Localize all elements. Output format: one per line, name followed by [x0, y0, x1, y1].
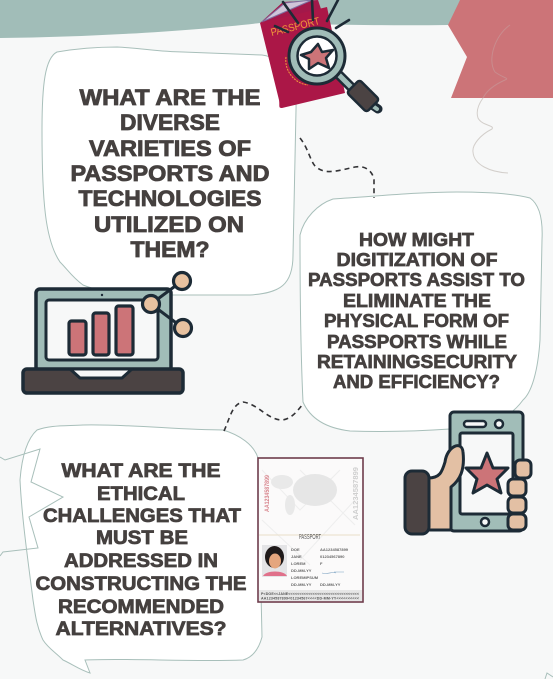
bar chart [69, 306, 133, 355]
icon: laptop with bar chart [23, 272, 192, 393]
left torn outline [0, 449, 63, 556]
passport page title: PASSPORT [299, 532, 321, 541]
decorative squiggle [473, 25, 510, 173]
heading: question 3: ETHICAL [97, 483, 185, 505]
arrow: dashed connector 2 to 3 [224, 402, 303, 431]
heading: question 2: PASSPORTS WHILE [327, 331, 507, 352]
passport data fields: DD-MM-YY [320, 582, 341, 587]
vertical grey number: AA1234587899 [353, 467, 360, 520]
panel: question 2 bubble [300, 192, 542, 431]
heading: question 1: DIVERSE [120, 110, 220, 135]
heading: question 2: RETAININGSECURITY [317, 351, 518, 372]
passport data fields: JANE [291, 554, 302, 559]
icon: hand holding phone with star [405, 412, 531, 534]
heading: question 3: RECOMMENDED [58, 596, 224, 618]
heading: question 2: DIGITIZATION OF [336, 249, 498, 270]
heading: question 3 [36, 460, 246, 640]
heading: question 3: ALTERNATIVES? [56, 618, 226, 640]
passport data fields: DD-MM-YY [291, 582, 312, 587]
passport cover label: PASSPORT [270, 15, 321, 39]
panel: question 1 bubble [42, 47, 296, 295]
heading: question 2: ELIMINATE THE [343, 290, 491, 311]
passport data fields: 01234567890 [320, 554, 345, 559]
heading: question 2: PHYSICAL FORM OF [324, 310, 509, 331]
heading: question 3: ADDRESSED IN [64, 550, 218, 572]
heading: question 3: MUST BE [96, 527, 188, 549]
portrait [262, 545, 287, 577]
heading: question 3: CONSTRUCTING THE [36, 573, 246, 595]
icon: passport with magnifier [260, 0, 379, 112]
heading: question 1: TECHNOLOGIES [78, 186, 262, 211]
passport data fields: DOE [291, 547, 300, 552]
panel: question 3 bubble [20, 425, 262, 673]
passport data fields [291, 547, 349, 587]
passport data fields: DD-MM-YY [291, 568, 312, 573]
icon: passport data page [258, 458, 363, 602]
share nodes [142, 272, 192, 336]
heading: question 2 [308, 229, 525, 392]
heading: question 1: VARIETIES OF [89, 136, 251, 161]
heading: question 2: AND EFFICIENCY? [333, 371, 500, 392]
heading: question 2: HOW MIGHT [359, 229, 475, 250]
heading: question 2: PASSPORTS ASSIST TO [308, 269, 525, 290]
passport data fields: LOREMIPSUM [291, 575, 319, 580]
heading: question 1: UTILIZED ON [94, 212, 244, 237]
decorative corner mark [545, 673, 553, 679]
heading: question 1 [70, 85, 270, 262]
passport data fields: F [320, 561, 323, 566]
heading: question 1: THEM? [130, 237, 210, 262]
vertical red number: AA1234587899 [265, 474, 271, 512]
passport data fields: LOREM [291, 561, 306, 566]
heading: question 1: WHAT ARE THE [80, 85, 260, 110]
top teal band [0, 0, 466, 38]
heading: question 3: CHALLENGES THAT [43, 505, 241, 527]
heading: question 1: PASSPORTS AND [70, 161, 270, 186]
heading: question 3: WHAT ARE THE [62, 460, 220, 482]
machine readable zone: AA1234587899<01234567<<<<DD-MM-YY<<<<<<<<<< [261, 596, 359, 600]
passport data fields: AA1234587899 [320, 547, 349, 552]
arrow: dashed connector 1 to 2 [300, 138, 374, 198]
red flag corner [448, 0, 553, 98]
machine readable zone: P<DOE<<JANE<<<<<<<<<<<<<<<<<<<<<<<<<<<<<<<< [261, 592, 359, 596]
machine readable zone [261, 592, 359, 600]
